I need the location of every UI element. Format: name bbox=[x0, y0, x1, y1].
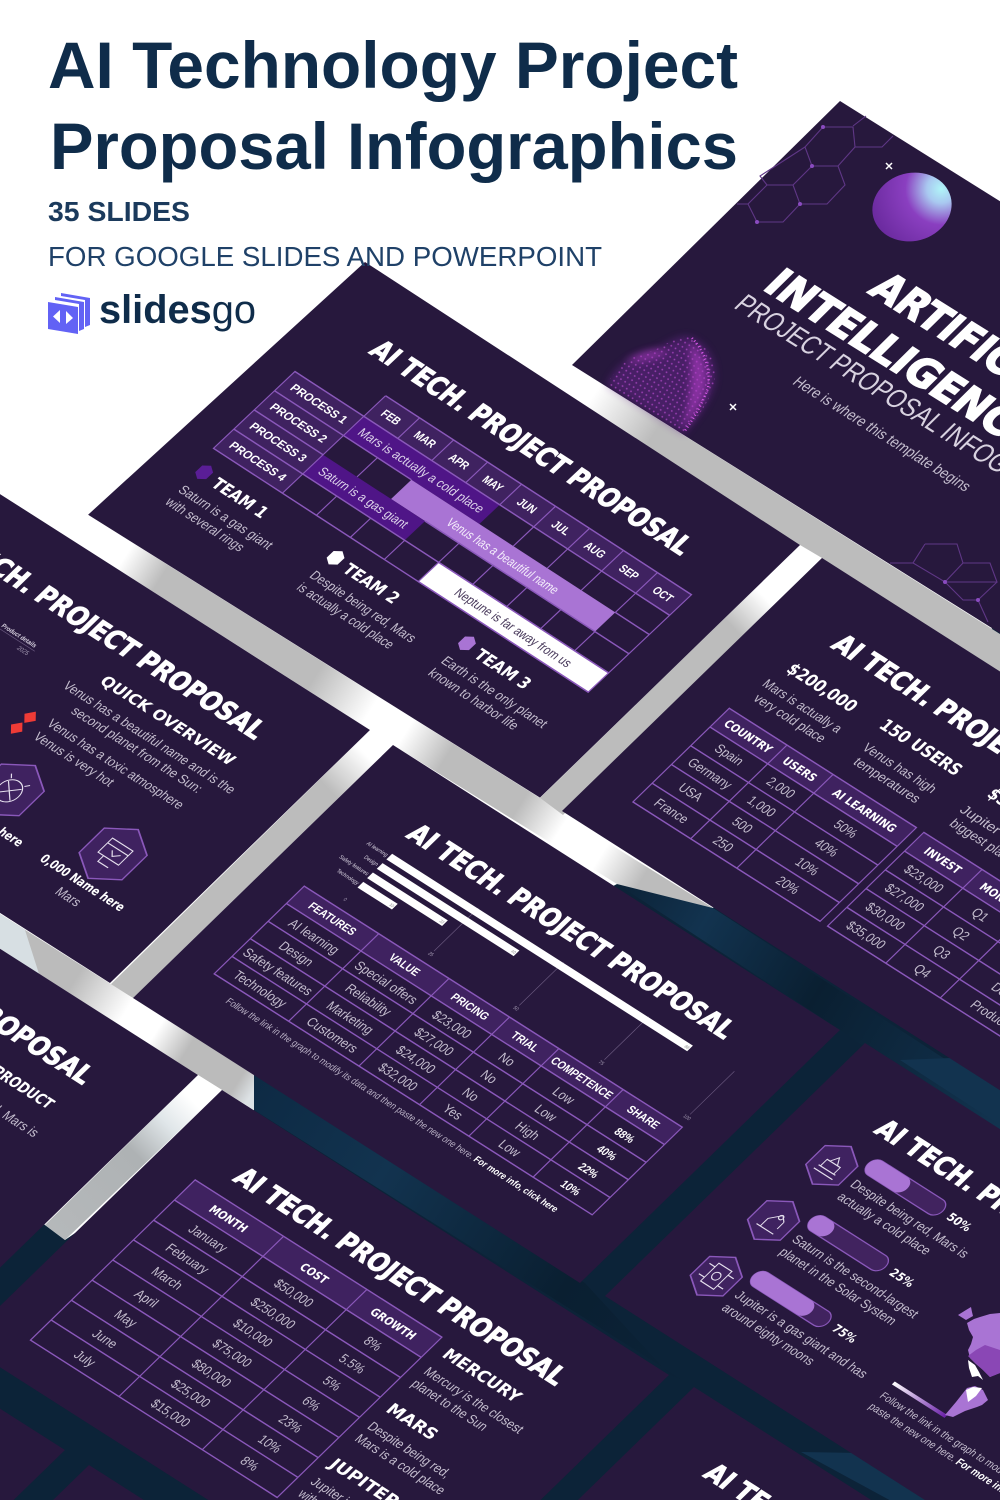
stat: revenue: Mars is actually a bbox=[759, 676, 847, 736]
team 1 bbox=[161, 462, 298, 565]
gutter: navy fold right bbox=[900, 1058, 1000, 1125]
features table bbox=[214, 886, 682, 1215]
bar chart: 10 bbox=[388, 902, 396, 909]
share column: 88% bbox=[611, 1126, 637, 1146]
process labels bbox=[226, 382, 351, 484]
stat right: Mars bbox=[52, 884, 85, 909]
subheading: QUICK OVERVIEW bbox=[96, 673, 239, 769]
slide: features table bbox=[133, 745, 840, 1283]
gantt table bbox=[214, 351, 691, 692]
cover sparkle bottom bbox=[730, 404, 736, 410]
slide: quick overview bbox=[0, 445, 370, 983]
table rows: Low bbox=[495, 1137, 525, 1160]
table: investment: Q1 bbox=[968, 905, 993, 925]
table rows: Safety features bbox=[239, 945, 317, 998]
red bullets bbox=[5, 707, 41, 738]
bar: Neptune: Neptune is far away from us bbox=[451, 586, 575, 670]
gutter: lower left fold bbox=[0, 914, 40, 977]
team 3: Earth is the only planet bbox=[438, 653, 552, 731]
table: country users: COUNTRY bbox=[720, 717, 776, 756]
icon: hexagon left bbox=[0, 752, 57, 828]
row 2 bbox=[736, 1188, 942, 1334]
table rows bbox=[221, 910, 580, 1160]
main title: Proposal Infographics bbox=[50, 109, 738, 183]
team 1: Saturn is a gas giant bbox=[175, 482, 277, 552]
row 2: 25% bbox=[886, 1266, 918, 1290]
table header: VALUE bbox=[385, 952, 422, 979]
table header: TRIAL bbox=[508, 1030, 542, 1055]
bar chart: 75 bbox=[596, 1060, 605, 1067]
cost table: June bbox=[89, 1326, 122, 1351]
cost table: 6% bbox=[298, 1393, 325, 1414]
bar chart: Technology bbox=[334, 868, 360, 887]
slide: bottom centre partial bbox=[0, 1465, 536, 1500]
month labels: AUG bbox=[580, 540, 608, 561]
stat: users: Venus has high bbox=[859, 740, 941, 796]
month labels: JUL bbox=[548, 519, 573, 538]
cost table: 10% bbox=[254, 1432, 286, 1456]
cost table: April bbox=[131, 1286, 162, 1310]
cost table: MONTH bbox=[205, 1203, 251, 1235]
stat: users: 150 USERS bbox=[875, 716, 967, 779]
table header bbox=[305, 901, 662, 1132]
table: country users bbox=[633, 708, 916, 921]
cost table: February bbox=[162, 1240, 213, 1277]
table rows: Customers bbox=[303, 1014, 362, 1056]
cost table: $15,000 bbox=[147, 1396, 194, 1430]
slide: stats and tables bbox=[562, 558, 1000, 1096]
team 3: known to harbor life bbox=[425, 665, 523, 733]
gutter: between overview and centre slide bbox=[110, 730, 393, 998]
cost table: 5% bbox=[319, 1373, 345, 1394]
bar: Mars: Mars is actually a cold place bbox=[354, 425, 488, 516]
bar chart: 22 bbox=[438, 919, 446, 925]
table rows: Low bbox=[531, 1101, 561, 1125]
team 1: TEAM 1 bbox=[207, 474, 273, 522]
stat: users bbox=[843, 716, 967, 810]
bar: Neptune bbox=[418, 562, 609, 692]
cost table bbox=[30, 1180, 442, 1497]
cost table: July bbox=[70, 1347, 100, 1370]
planet: Mercury: Mercury is the closest bbox=[420, 1364, 528, 1436]
planet: Mercury bbox=[408, 1344, 548, 1449]
slide: cover bbox=[572, 101, 1000, 645]
main title bbox=[48, 28, 738, 183]
share column: 22% bbox=[575, 1161, 601, 1181]
row 3: around eighty moons bbox=[718, 1300, 819, 1368]
product details note: 2025 bbox=[15, 645, 31, 657]
bar: Mars bbox=[343, 416, 500, 524]
slide: cost table bbox=[0, 1090, 669, 1500]
row 1: 50% bbox=[943, 1210, 975, 1234]
cost table: $75,000 bbox=[209, 1336, 256, 1370]
process labels: PROCESS 1 bbox=[287, 382, 350, 426]
gutter: between timeline and right table slide bbox=[540, 545, 822, 815]
bar chart: 25 bbox=[426, 951, 435, 958]
bar: Saturn: Saturn is a gas giant bbox=[314, 464, 412, 531]
table: country users: AI LEARNING bbox=[829, 787, 900, 835]
logo bbox=[48, 288, 256, 334]
table rows: Design bbox=[275, 938, 317, 969]
icon: slidesgo stack bbox=[48, 293, 90, 334]
table rows: No bbox=[495, 1050, 519, 1069]
table header: COMPETENCE bbox=[547, 1055, 615, 1102]
share column bbox=[557, 1126, 637, 1198]
row 1 bbox=[794, 1133, 992, 1273]
table: investment: $35,000 bbox=[843, 918, 890, 952]
share column: 10% bbox=[557, 1178, 583, 1198]
table: country users: USA bbox=[675, 780, 707, 804]
row 3: 75% bbox=[829, 1322, 861, 1346]
table: country users: Germany bbox=[684, 755, 736, 792]
bar chart: 50 bbox=[511, 1005, 520, 1013]
team 1: with several rings bbox=[161, 494, 249, 554]
table: investment: $23,000 bbox=[900, 862, 948, 896]
process labels: PROCESS 4 bbox=[226, 440, 290, 484]
stat: third bbox=[944, 780, 1000, 870]
table header: SHARE bbox=[623, 1104, 662, 1132]
stat: users: temperatures bbox=[850, 754, 925, 806]
table rows: Technology bbox=[230, 967, 291, 1011]
product details note: Product details bbox=[0, 623, 39, 650]
cost table: March bbox=[148, 1264, 187, 1293]
icon: hexagon right bbox=[67, 816, 160, 892]
gutter: upper long diagonal bbox=[0, 445, 713, 908]
cost table: May bbox=[111, 1307, 141, 1330]
cover gradient sphere bbox=[865, 164, 959, 250]
planet: Mercury: MERCURY bbox=[438, 1345, 527, 1406]
planet: Jupiter bbox=[294, 1454, 428, 1500]
month labels bbox=[377, 408, 676, 605]
team 2: is actually a cold place bbox=[293, 580, 398, 652]
table: country users: 500 bbox=[729, 814, 757, 836]
cost table: 23% bbox=[275, 1412, 307, 1436]
table rows: $23,000 bbox=[428, 1007, 476, 1041]
stat: revenue: very cold place bbox=[750, 691, 830, 745]
bar chart: Design bbox=[362, 855, 379, 868]
stat: revenue bbox=[746, 656, 867, 748]
bar: Venus bbox=[391, 480, 615, 632]
overview text: second planet from the Sun: bbox=[68, 703, 207, 796]
month labels: OCT bbox=[649, 585, 676, 605]
subtitle: platforms: FOR GOOGLE SLIDES AND POWERPOINT bbox=[48, 241, 602, 272]
row 1: actually a cold place bbox=[834, 1189, 935, 1258]
bar chart: 0 bbox=[341, 897, 348, 903]
caption: Follow the link in the graph to modify its data and then paste the new one here. For more info, click here bbox=[223, 996, 561, 1214]
month labels: FEB bbox=[377, 408, 403, 428]
cost table: $250,000 bbox=[247, 1294, 299, 1332]
stat: revenue: $200,000 bbox=[782, 660, 862, 716]
cost table: $10,000 bbox=[229, 1316, 276, 1350]
row 2: planet in the Solar System bbox=[776, 1244, 901, 1328]
gutter: product and month table gap bbox=[45, 1075, 222, 1240]
team 3: TEAM 3 bbox=[470, 645, 536, 693]
bar chart: 40 bbox=[510, 949, 518, 955]
table: investment: Q3 bbox=[929, 942, 954, 962]
table rows: Reliability bbox=[342, 981, 396, 1019]
team 2: TEAM 2 bbox=[338, 560, 405, 607]
month labels: JUN bbox=[513, 496, 539, 516]
slide: bottom left partial bbox=[0, 1165, 65, 1500]
row 1: Despite being red, Mars is bbox=[847, 1177, 973, 1261]
overview text bbox=[16, 678, 240, 839]
table: investment: $30,000 bbox=[862, 899, 909, 933]
table: investment: Q4 bbox=[910, 961, 935, 981]
cost table: 8% bbox=[237, 1453, 263, 1474]
table: investment: $27,000 bbox=[881, 880, 928, 914]
cost table: COST bbox=[296, 1261, 332, 1287]
table: investment bbox=[828, 832, 1000, 1045]
table rows: $27,000 bbox=[411, 1025, 458, 1059]
cost table: $50,000 bbox=[270, 1276, 317, 1310]
cost table: 5.5% bbox=[335, 1351, 370, 1377]
row 2: Saturn is the second-largest bbox=[789, 1232, 923, 1321]
table rows: Special offers bbox=[351, 958, 422, 1007]
map legend bar bbox=[892, 1382, 947, 1418]
table rows: AI learning bbox=[285, 916, 343, 957]
overview text: Venus is very hot bbox=[30, 729, 119, 789]
stat right: 0,000 Name here bbox=[37, 852, 129, 914]
team 2: Despite being red, Mars bbox=[306, 568, 420, 645]
cover tagline: Here is where this template begins bbox=[789, 374, 974, 495]
cost table: January bbox=[185, 1222, 232, 1255]
cover hexagon network top bbox=[737, 116, 893, 224]
planet: Mars: Mars is a cold place bbox=[352, 1431, 449, 1497]
table header: FEATURES bbox=[305, 901, 359, 938]
gutter: lower left diagonal bbox=[0, 914, 254, 1110]
table rows: No bbox=[459, 1085, 483, 1104]
table: country users: 2,000 bbox=[763, 774, 799, 801]
table: country users: 50% bbox=[830, 817, 862, 841]
table header: PRICING bbox=[447, 992, 492, 1023]
bar: Saturn bbox=[303, 455, 425, 540]
table rows: Marketing bbox=[323, 998, 378, 1037]
planet: Mercury: planet to the Sun bbox=[408, 1376, 492, 1434]
planet: Mars bbox=[352, 1399, 482, 1497]
table rows: High bbox=[512, 1119, 544, 1143]
month labels: MAR bbox=[410, 429, 439, 451]
subtitle: slide count: 35 SLIDES bbox=[48, 196, 190, 227]
bar: Venus: Venus has a beautiful name bbox=[443, 515, 563, 597]
bar chart: 88 bbox=[683, 1044, 691, 1050]
heading: AI TECH. PROJECT PROPOSAL bbox=[226, 1162, 573, 1392]
table rows: Yes bbox=[439, 1101, 467, 1123]
map: Americas bbox=[945, 1307, 1000, 1417]
table: country users: 250 bbox=[709, 833, 737, 855]
bar chart: Safety features bbox=[337, 855, 370, 877]
row 3 bbox=[679, 1244, 891, 1394]
gutter: navy fold bottom bbox=[801, 1452, 1000, 1500]
overview text: Venus has a beautiful name and is the bbox=[60, 678, 240, 797]
table: country users: 1,000 bbox=[744, 793, 780, 820]
gutter: navy diagonal right bbox=[617, 884, 1000, 1140]
table: country users: USERS bbox=[779, 755, 820, 784]
cost table: $80,000 bbox=[188, 1356, 235, 1390]
cover particle wave bbox=[607, 337, 715, 434]
bar chart bbox=[312, 834, 738, 1122]
slide: product bbox=[0, 790, 198, 1328]
wordmark: slidesgo bbox=[99, 288, 256, 332]
table: investment: Q2 bbox=[949, 924, 973, 943]
cost table: GROWTH bbox=[367, 1306, 419, 1343]
share column: 40% bbox=[593, 1143, 619, 1163]
slide: progress bars and map bbox=[605, 1043, 1000, 1500]
cover hexagon network bottom bbox=[890, 544, 997, 622]
table rows: $32,000 bbox=[375, 1060, 422, 1094]
bar chart: AI learning bbox=[364, 841, 389, 858]
month labels: SEP bbox=[615, 563, 642, 583]
process labels: PROCESS 3 bbox=[246, 421, 309, 465]
cost table: $25,000 bbox=[167, 1376, 214, 1410]
month labels: MAY bbox=[479, 474, 506, 495]
slide: bottom right bbox=[434, 1387, 1000, 1500]
bar chart: 100 bbox=[681, 1114, 692, 1122]
heading: AI TECH. PROJECT PROPOSAL bbox=[362, 335, 699, 561]
table rows: Low bbox=[549, 1084, 579, 1107]
planet: Mars: Despite being red, bbox=[364, 1419, 455, 1481]
table: country users: 20% bbox=[772, 873, 804, 897]
product details note bbox=[0, 601, 41, 658]
table: investment: INVEST bbox=[920, 845, 965, 877]
table: country users: France bbox=[651, 795, 693, 826]
gutter: cover shadow bbox=[365, 262, 1000, 680]
table: country users: 10% bbox=[792, 854, 823, 879]
process labels: PROCESS 2 bbox=[266, 402, 330, 445]
table: country users: 40% bbox=[811, 836, 843, 860]
overview text: Venus has a toxic atmosphere bbox=[44, 716, 188, 812]
gutter: navy diagonal lower bbox=[254, 1075, 694, 1387]
cost table: 8% bbox=[360, 1333, 386, 1354]
slide: gantt timeline bbox=[88, 258, 805, 804]
main title: AI Technology Project bbox=[48, 28, 738, 102]
table: country users: Spain bbox=[711, 741, 748, 768]
team 2 bbox=[292, 548, 440, 658]
month labels: APR bbox=[445, 452, 472, 472]
table rows: $24,000 bbox=[392, 1042, 439, 1076]
heading: AI TECH. PROJECT PROPOSAL bbox=[400, 819, 742, 1045]
table rows: No bbox=[477, 1067, 501, 1086]
planet: Mars: MARS bbox=[382, 1399, 443, 1444]
team 3 bbox=[423, 633, 572, 743]
row 3: Jupiter is a gas giant and has bbox=[731, 1288, 872, 1381]
cover sparkle top bbox=[886, 163, 892, 169]
